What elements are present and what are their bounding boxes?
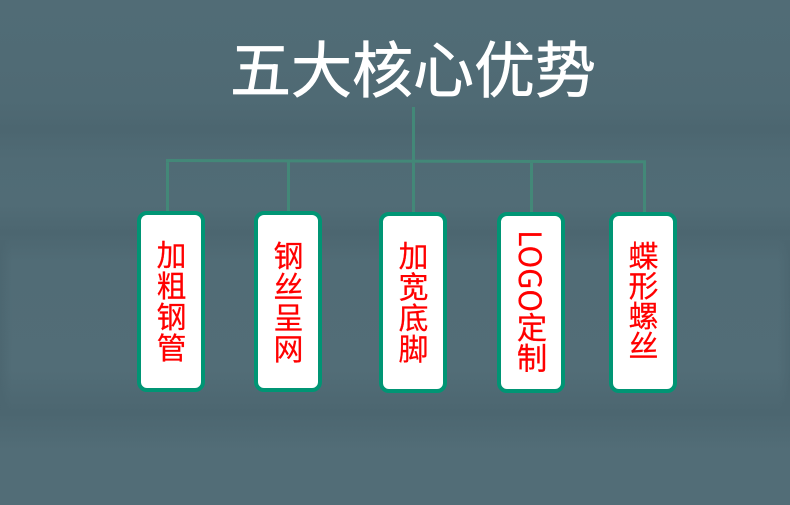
card: 加宽底脚: 加 — [398, 232, 428, 276]
card: 加宽底脚: 底 — [398, 294, 428, 338]
card: LOGO定制 — [497, 212, 565, 393]
card: 加宽底脚: 脚 — [398, 325, 428, 369]
card: 加粗钢管: 钢 — [156, 293, 186, 337]
card: 蝶形螺丝: 丝 — [628, 322, 658, 366]
card: LOGO定制: LOGO定制 — [510, 230, 554, 373]
card: 钢丝呈网: 网 — [274, 325, 304, 369]
card: 钢丝呈网 — [254, 211, 322, 392]
card: 钢丝呈网: 丝 — [274, 263, 304, 307]
card: 加粗钢管: 粗 — [156, 262, 186, 306]
card: 加宽底脚: 宽 — [398, 263, 428, 307]
card: 钢丝呈网: 钢 — [274, 232, 304, 276]
card: 加粗钢管: 加 — [156, 231, 186, 275]
card: 蝶形螺丝: 螺 — [628, 292, 658, 336]
card: 蝶形螺丝: 形 — [628, 262, 658, 306]
card: 加粗钢管: 管 — [156, 324, 186, 368]
card: 加宽底脚 — [379, 212, 447, 393]
card: 蝶形螺丝: 蝶 — [628, 232, 658, 276]
title: 五大核心优势 — [230, 21, 596, 110]
card: 蝶形螺丝 — [609, 212, 677, 393]
card: 钢丝呈网: 呈 — [274, 294, 304, 338]
card: 加粗钢管 — [137, 211, 205, 392]
